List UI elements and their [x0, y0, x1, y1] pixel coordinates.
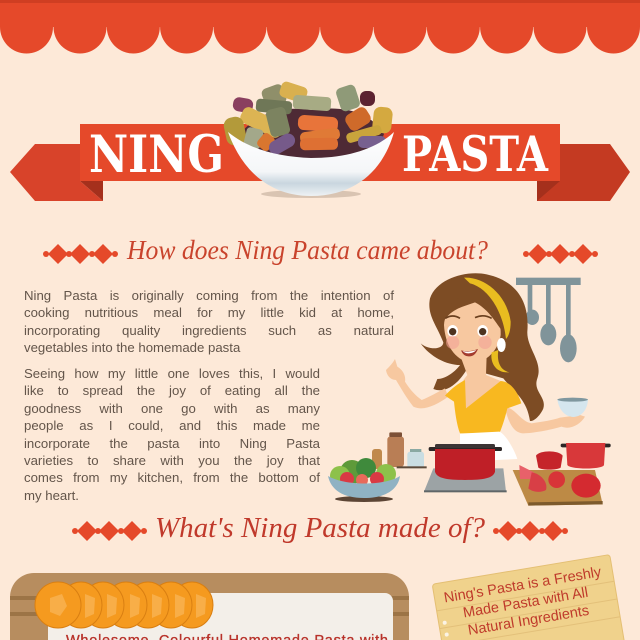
neck and chest [460, 355, 501, 408]
icon: chopping board with tomatoes [513, 465, 603, 506]
scalloped top border [0, 0, 640, 54]
heading ornament left 2 [72, 521, 147, 541]
heading: what's Ning Pasta made of: What's Ning Pasta made of? [155, 513, 485, 544]
text block: second paragraph: goodness with one go with as many [24, 401, 320, 416]
heading ornament right 2 [493, 521, 568, 541]
text block: intro paragraph [24, 288, 394, 355]
text block: second paragraph: varieties to share with you the joy that [24, 453, 320, 468]
title word right: PASTA [402, 125, 549, 183]
text block: second paragraph: incorporate the pasta into Ning Pasta [24, 436, 320, 451]
face [444, 301, 501, 363]
text block: second paragraph: comes from my kitchen, from the bottom of [24, 470, 320, 485]
woman [386, 273, 585, 462]
hair fringe [443, 294, 501, 329]
note text [443, 564, 609, 640]
icon: steam bowl in hand [557, 398, 588, 417]
heading ornament left 1 [43, 244, 118, 264]
paper sheet [48, 593, 393, 640]
earring [497, 338, 506, 352]
text block: second paragraph: like to spread the joy of eating all the [24, 383, 320, 398]
title ribbon [10, 124, 630, 201]
note text: Natural Ingredients [467, 603, 590, 639]
note binding holes [442, 620, 451, 640]
icon: hanging utensils [516, 278, 581, 362]
text block: second paragraph: people as I could, and this made me [24, 418, 320, 433]
heading ornament right 1 [523, 244, 598, 264]
panel: wooden board [10, 573, 409, 640]
icon: jars [387, 432, 427, 468]
text block: second paragraph: my heart. [24, 488, 79, 503]
left ribbon tail [10, 144, 103, 201]
icon: red pot on stove [424, 444, 507, 492]
note text: Made Pasta with All [462, 585, 589, 621]
bowl body [228, 132, 394, 196]
icon: red pans [536, 443, 611, 470]
heading: how does Ning Pasta came about: How does Ning Pasta came about? [126, 235, 488, 265]
yellow top [445, 380, 521, 433]
brows [445, 316, 460, 318]
smile [461, 349, 478, 356]
icon: bowl of pasta [222, 80, 394, 198]
hair [421, 273, 544, 421]
left ribbon fold [80, 181, 103, 201]
headband [464, 278, 511, 339]
icon: salad bowl [328, 449, 400, 502]
right ribbon tail [537, 144, 630, 201]
text block: intro paragraph: cooking nutritious meal for my little kid at home, [24, 305, 394, 320]
note ruled lines [437, 581, 620, 640]
title word left: NING [89, 125, 224, 185]
bowl shadow [261, 190, 361, 198]
note text: Ning's Pasta is a Freshly [443, 564, 603, 606]
text block: intro paragraph: incorporating quality ingredients such as natural [24, 323, 394, 338]
pasta pile [222, 80, 393, 158]
text block: second paragraph: Seeing how my little one loves this, I would [24, 366, 320, 381]
panel: yellow note [432, 555, 628, 640]
apron [460, 432, 517, 462]
eyes [447, 325, 458, 337]
illustration: woman cooking in kitchen [386, 273, 611, 506]
text block: intro paragraph: vegetables into the homemade pasta [24, 340, 240, 355]
text block: intro paragraph: Ning Pasta is originally coming from the intention of [24, 288, 394, 303]
right ribbon fold [537, 181, 560, 201]
cheeks [446, 336, 459, 349]
icon: row of orange pasta slices [35, 582, 213, 628]
left arm and hand [386, 359, 448, 408]
ribbon centre band [80, 124, 560, 181]
text block: second paragraph [24, 366, 320, 503]
right arm and hand [505, 408, 585, 433]
